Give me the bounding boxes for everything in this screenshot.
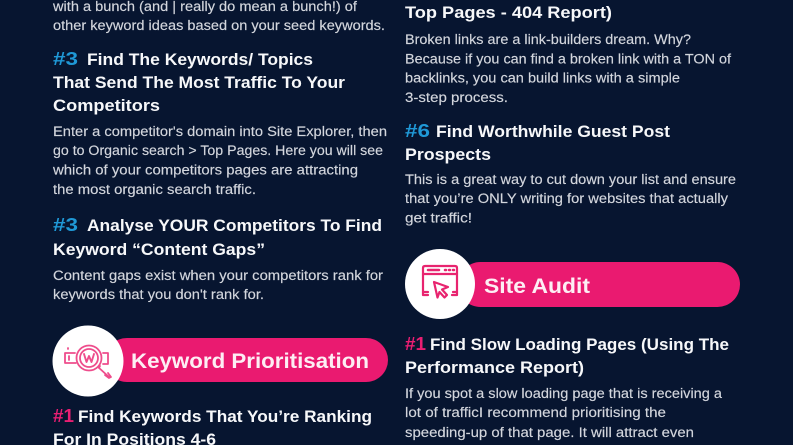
heading: #3 analyse competitors: #3: [53, 214, 78, 235]
heading: #6 guest post prospects: #6: [405, 120, 430, 141]
heading: top pages 404 report: Top Pages - 404 Report): [405, 3, 612, 22]
heading: #3 find the keywords: [53, 48, 345, 115]
text block: broken links: backlinks, you can build links with a simple: [405, 70, 680, 86]
heading: #1 find keywords ranking: Find Keywords That You’re Ranking: [78, 407, 372, 426]
heading: #1 slow loading pages: Performance Report): [405, 358, 584, 377]
text block: broken links: Because if you can find a broken link with a TON of: [405, 52, 731, 66]
text block: site explorer instructions: which of your competitors pages are attracting: [52, 162, 358, 178]
icon: browser window with cursor: [423, 266, 457, 298]
text block: slow page advice: If you spot a slow loading page that is receiving a: [405, 386, 723, 401]
heading: #1 find keywords ranking: [53, 405, 372, 445]
banner title: Site Audit: [484, 275, 590, 298]
right column: [405, 3, 740, 440]
section banner: site audit: [405, 249, 740, 319]
left column: [52, 0, 388, 445]
text block: site explorer instructions: Enter a competitor's domain into Site Explorer, then: [53, 124, 387, 139]
text block: guest post advice: [405, 172, 736, 226]
heading: #3 analyse competitors: [53, 214, 382, 259]
text block: broken links: 3-step process.: [405, 90, 508, 105]
text block: content gaps: keywords that you don't rank for.: [53, 287, 264, 302]
pill: [458, 262, 740, 307]
text block: site explorer instructions: the most organic search traffic.: [53, 182, 256, 197]
text block: slow page advice: lot of trafficI recommend prioritising the: [405, 405, 666, 420]
text block: broken links: Broken links are a link-builders dream. Why?: [405, 32, 691, 47]
heading: #3 find the keywords: That Send The Most Traffic To Your: [53, 73, 345, 92]
text block: seed keywords continuation: other keyword ideas based on your seed keywords.: [53, 18, 385, 33]
section banner: keyword prioritisation: [52, 326, 388, 396]
heading: #3 find the keywords: #3: [53, 48, 78, 69]
heading: #1 find keywords ranking: #1: [53, 405, 74, 426]
heading: #6 guest post prospects: [405, 120, 670, 164]
text block: site explorer instructions: go to Organic search > Top Pages. Here you will see: [53, 143, 383, 158]
banner title: Keyword Prioritisation: [131, 350, 369, 373]
heading: #1 slow loading pages: #1: [405, 333, 426, 354]
text block: guest post advice: This is a great way to cut down your list and ensure: [405, 172, 736, 187]
icon: magnifier with W: [65, 346, 111, 378]
heading: #1 slow loading pages: [405, 333, 729, 377]
text block: slow page advice: [405, 386, 723, 440]
heading: #6 guest post prospects: Prospects: [405, 145, 491, 164]
text block: content gaps: Content gaps exist when your competitors rank for: [53, 268, 384, 283]
heading: #1 slow loading pages: Find Slow Loading Pages (Using The: [430, 335, 729, 354]
text block: content gaps: [53, 268, 384, 302]
circle badge: [405, 249, 475, 319]
heading: #3 analyse competitors: Keyword “Content Gaps”: [53, 240, 265, 259]
text block: guest post advice: that you’re ONLY writing for websites that actually: [405, 191, 728, 206]
heading: #3 find the keywords: Find The Keywords/ Topics: [87, 50, 313, 69]
heading: #3 find the keywords: Competitors: [53, 96, 160, 115]
text block: broken links: [405, 32, 731, 105]
circle badge: [52, 326, 124, 396]
text block: seed keywords continuation: [52, 0, 385, 33]
text block: guest post advice: get traffic!: [405, 210, 472, 226]
text block: slow page advice: speeding-up of that page. It will attract even: [405, 425, 694, 440]
text block: site explorer instructions: [52, 124, 387, 197]
heading: #6 guest post prospects: Find Worthwhile Guest Post: [436, 122, 670, 141]
pill: [105, 338, 388, 382]
heading: #3 analyse competitors: Analyse YOUR Competitors To Find: [87, 216, 382, 235]
